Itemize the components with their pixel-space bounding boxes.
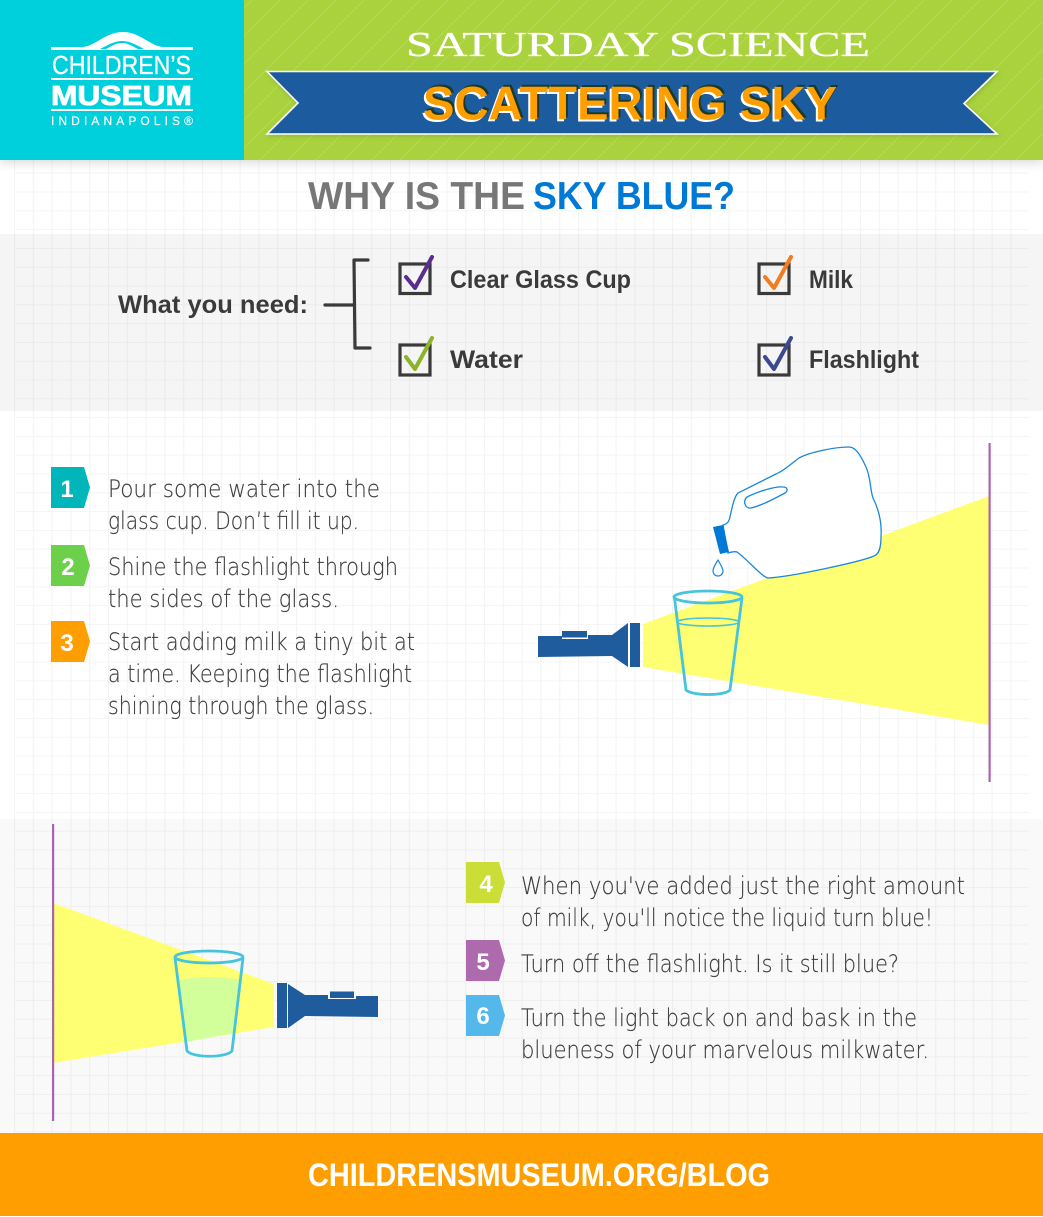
step 2: the sides of the glass.	[108, 585, 339, 613]
logo panel	[0, 0, 244, 160]
wall	[52, 824, 54, 1121]
logo: Children's Museum Indianapolis: MUSEUM	[51, 80, 192, 111]
title: Scattering Sky: SCATTERING SKY	[425, 74, 839, 128]
step 2	[51, 545, 398, 613]
step 4	[466, 862, 965, 932]
step 3: shining through the glass.	[108, 692, 374, 720]
logo: Children's Museum Indianapolis	[51, 32, 193, 128]
item: milk: Milk	[809, 266, 853, 294]
logo: Children's Museum Indianapolis: CHILDREN’S	[52, 50, 191, 80]
step 5: 5	[476, 949, 490, 976]
header green background	[0, 0, 1043, 160]
step 2: 2	[61, 554, 75, 581]
step 3: a time. Keeping the flashlight	[108, 660, 412, 688]
flashlight	[277, 983, 378, 1028]
panel: what you need background	[0, 234, 1043, 411]
subtitle: Saturday Science: SATURDAY SCIENCE	[406, 25, 870, 64]
milky liquid	[178, 977, 241, 1042]
title: Scattering Sky: SCATTERING SKY	[423, 76, 837, 130]
item: water: Water	[450, 346, 523, 374]
step 6: 6	[476, 1003, 490, 1030]
step 5	[466, 940, 899, 981]
illustration: glass turning blue	[52, 824, 378, 1121]
step 1: 1	[60, 476, 74, 503]
item: clear glass cup	[400, 257, 631, 294]
header banner	[0, 0, 1043, 160]
milk jug	[713, 447, 881, 578]
title: Scattering Sky: SCATTERING SKY	[421, 78, 835, 132]
step 5: Turn off the flashlight. Is it still blue?	[521, 950, 899, 978]
glass of water	[674, 591, 742, 694]
heading: Why is the sky blue: SKY BLUE?	[533, 175, 735, 218]
light beam	[643, 496, 989, 725]
ribbon	[267, 72, 997, 134]
heading: Why is the sky blue	[308, 175, 735, 218]
step 3: 3	[60, 630, 74, 657]
step 4: of milk, you'll notice the liquid turn blue!	[521, 904, 933, 932]
item: flashlight: Flashlight	[809, 346, 920, 374]
footer	[0, 1133, 1043, 1216]
wall	[988, 443, 991, 782]
heading: Why is the sky blue: WHY IS THE	[308, 175, 525, 218]
graph paper grid	[14, 160, 1029, 1133]
panel: lower steps background	[0, 819, 1043, 1133]
item: water	[400, 338, 523, 375]
item: clear glass cup: Clear Glass Cup	[450, 266, 631, 294]
bracket	[325, 260, 370, 348]
step 3	[51, 621, 415, 720]
logo: Children's Museum Indianapolis: INDIANAPOLIS®	[51, 114, 193, 128]
step 6	[466, 995, 929, 1064]
glass	[175, 951, 243, 1056]
step 3: Start adding milk a tiny bit at	[108, 628, 415, 656]
step 4: 4	[479, 871, 493, 898]
step 2: Shine the flashlight through	[108, 553, 398, 581]
flashlight	[538, 623, 640, 667]
item: flashlight	[759, 338, 920, 375]
step 1: Pour some water into the	[108, 475, 380, 503]
light beam	[53, 903, 274, 1063]
step 4: When you've added just the right amount	[521, 872, 965, 900]
step 1	[51, 467, 380, 535]
footer: CHILDRENSMUSEUM.ORG/BLOG	[308, 1157, 770, 1193]
illustration: pouring milk into glass	[538, 443, 991, 782]
step 6: blueness of your marvelous milkwater.	[521, 1036, 929, 1064]
step 1: glass cup. Don’t fill it up.	[108, 507, 359, 535]
what you need label: What you need:	[118, 291, 308, 319]
item: milk	[759, 257, 853, 294]
step 6: Turn the light back on and bask in the	[521, 1004, 917, 1032]
